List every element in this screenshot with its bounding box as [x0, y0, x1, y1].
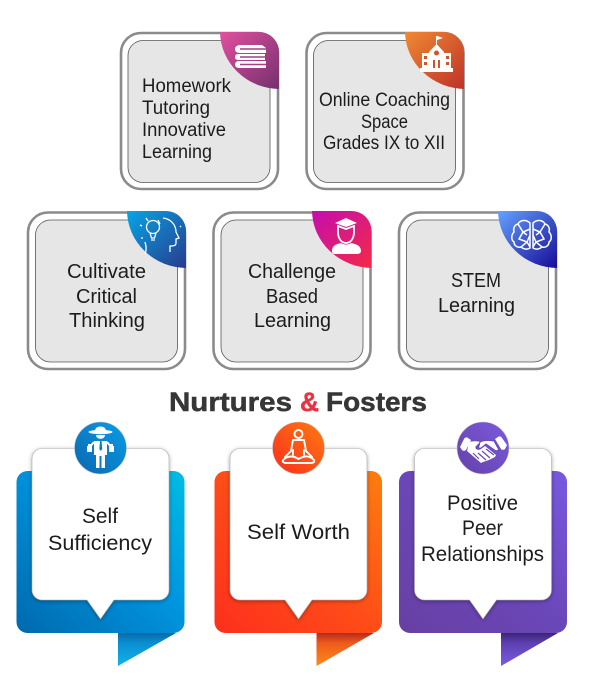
icon: school	[420, 36, 453, 72]
title: Nurtures	[169, 387, 292, 417]
panel: challenge based learning card	[214, 210, 373, 369]
panel: critical thinking card	[28, 210, 187, 369]
card text: Space	[361, 112, 408, 133]
white speech card	[414, 448, 552, 619]
card text: Cultivate	[67, 261, 146, 283]
card text	[67, 261, 146, 332]
card text	[48, 505, 153, 555]
corner badge: graduate	[312, 210, 373, 268]
coloured backing	[399, 471, 567, 633]
card text: Challenge	[248, 261, 336, 283]
card text: Sufficiency	[48, 532, 153, 555]
title: &	[300, 387, 319, 417]
card text: Grades IX to XII	[323, 133, 445, 154]
card text: Critical	[76, 286, 137, 308]
corner badge: head with bulb	[127, 210, 187, 268]
card text: Learning	[142, 142, 212, 163]
icon: head with bulb	[140, 218, 181, 254]
card text: Relationships	[421, 543, 544, 566]
card text: Online Coaching	[319, 90, 450, 111]
card text	[438, 270, 515, 317]
panel: positive peer relationships	[399, 422, 567, 666]
card text: Peer	[462, 517, 503, 540]
card text: Learning	[254, 310, 331, 332]
corner badge: brain	[498, 210, 558, 268]
white speech card	[230, 448, 367, 619]
ribbon tail	[501, 633, 558, 666]
icon: brain	[512, 220, 551, 249]
card text: Learning	[438, 295, 515, 317]
corner badge: school	[405, 31, 466, 89]
panel: STEM learning card	[399, 210, 558, 369]
panel: online coaching card	[306, 31, 466, 189]
card text: Self	[82, 505, 118, 528]
card text: Thinking	[69, 310, 145, 332]
icon circle: meditation	[272, 422, 324, 474]
icon circle: handshake	[457, 422, 509, 474]
coloured backing	[16, 471, 184, 633]
coloured backing	[214, 471, 382, 633]
card text: Based	[266, 286, 318, 308]
white speech card	[32, 448, 169, 619]
card text	[421, 492, 544, 566]
card text	[142, 76, 231, 163]
corner badge: books	[220, 31, 280, 89]
card text: Tutoring	[142, 98, 210, 119]
icon: books	[235, 45, 266, 68]
panel: homework tutoring card	[121, 31, 280, 189]
ribbon tail	[316, 633, 374, 666]
card text: STEM	[451, 270, 501, 292]
panel: self sufficiency	[16, 422, 184, 666]
title: Fosters	[326, 387, 427, 417]
card text: Innovative	[142, 120, 226, 141]
card text	[319, 90, 450, 154]
card text: Homework	[142, 76, 231, 97]
ribbon tail	[118, 633, 176, 666]
panel: self worth	[214, 422, 382, 666]
title	[169, 387, 427, 417]
icon circle: businessman	[74, 422, 126, 474]
card text: Positive	[447, 492, 518, 515]
card text: Self Worth	[247, 521, 350, 544]
icon: graduate	[332, 218, 361, 254]
card text	[248, 261, 336, 332]
